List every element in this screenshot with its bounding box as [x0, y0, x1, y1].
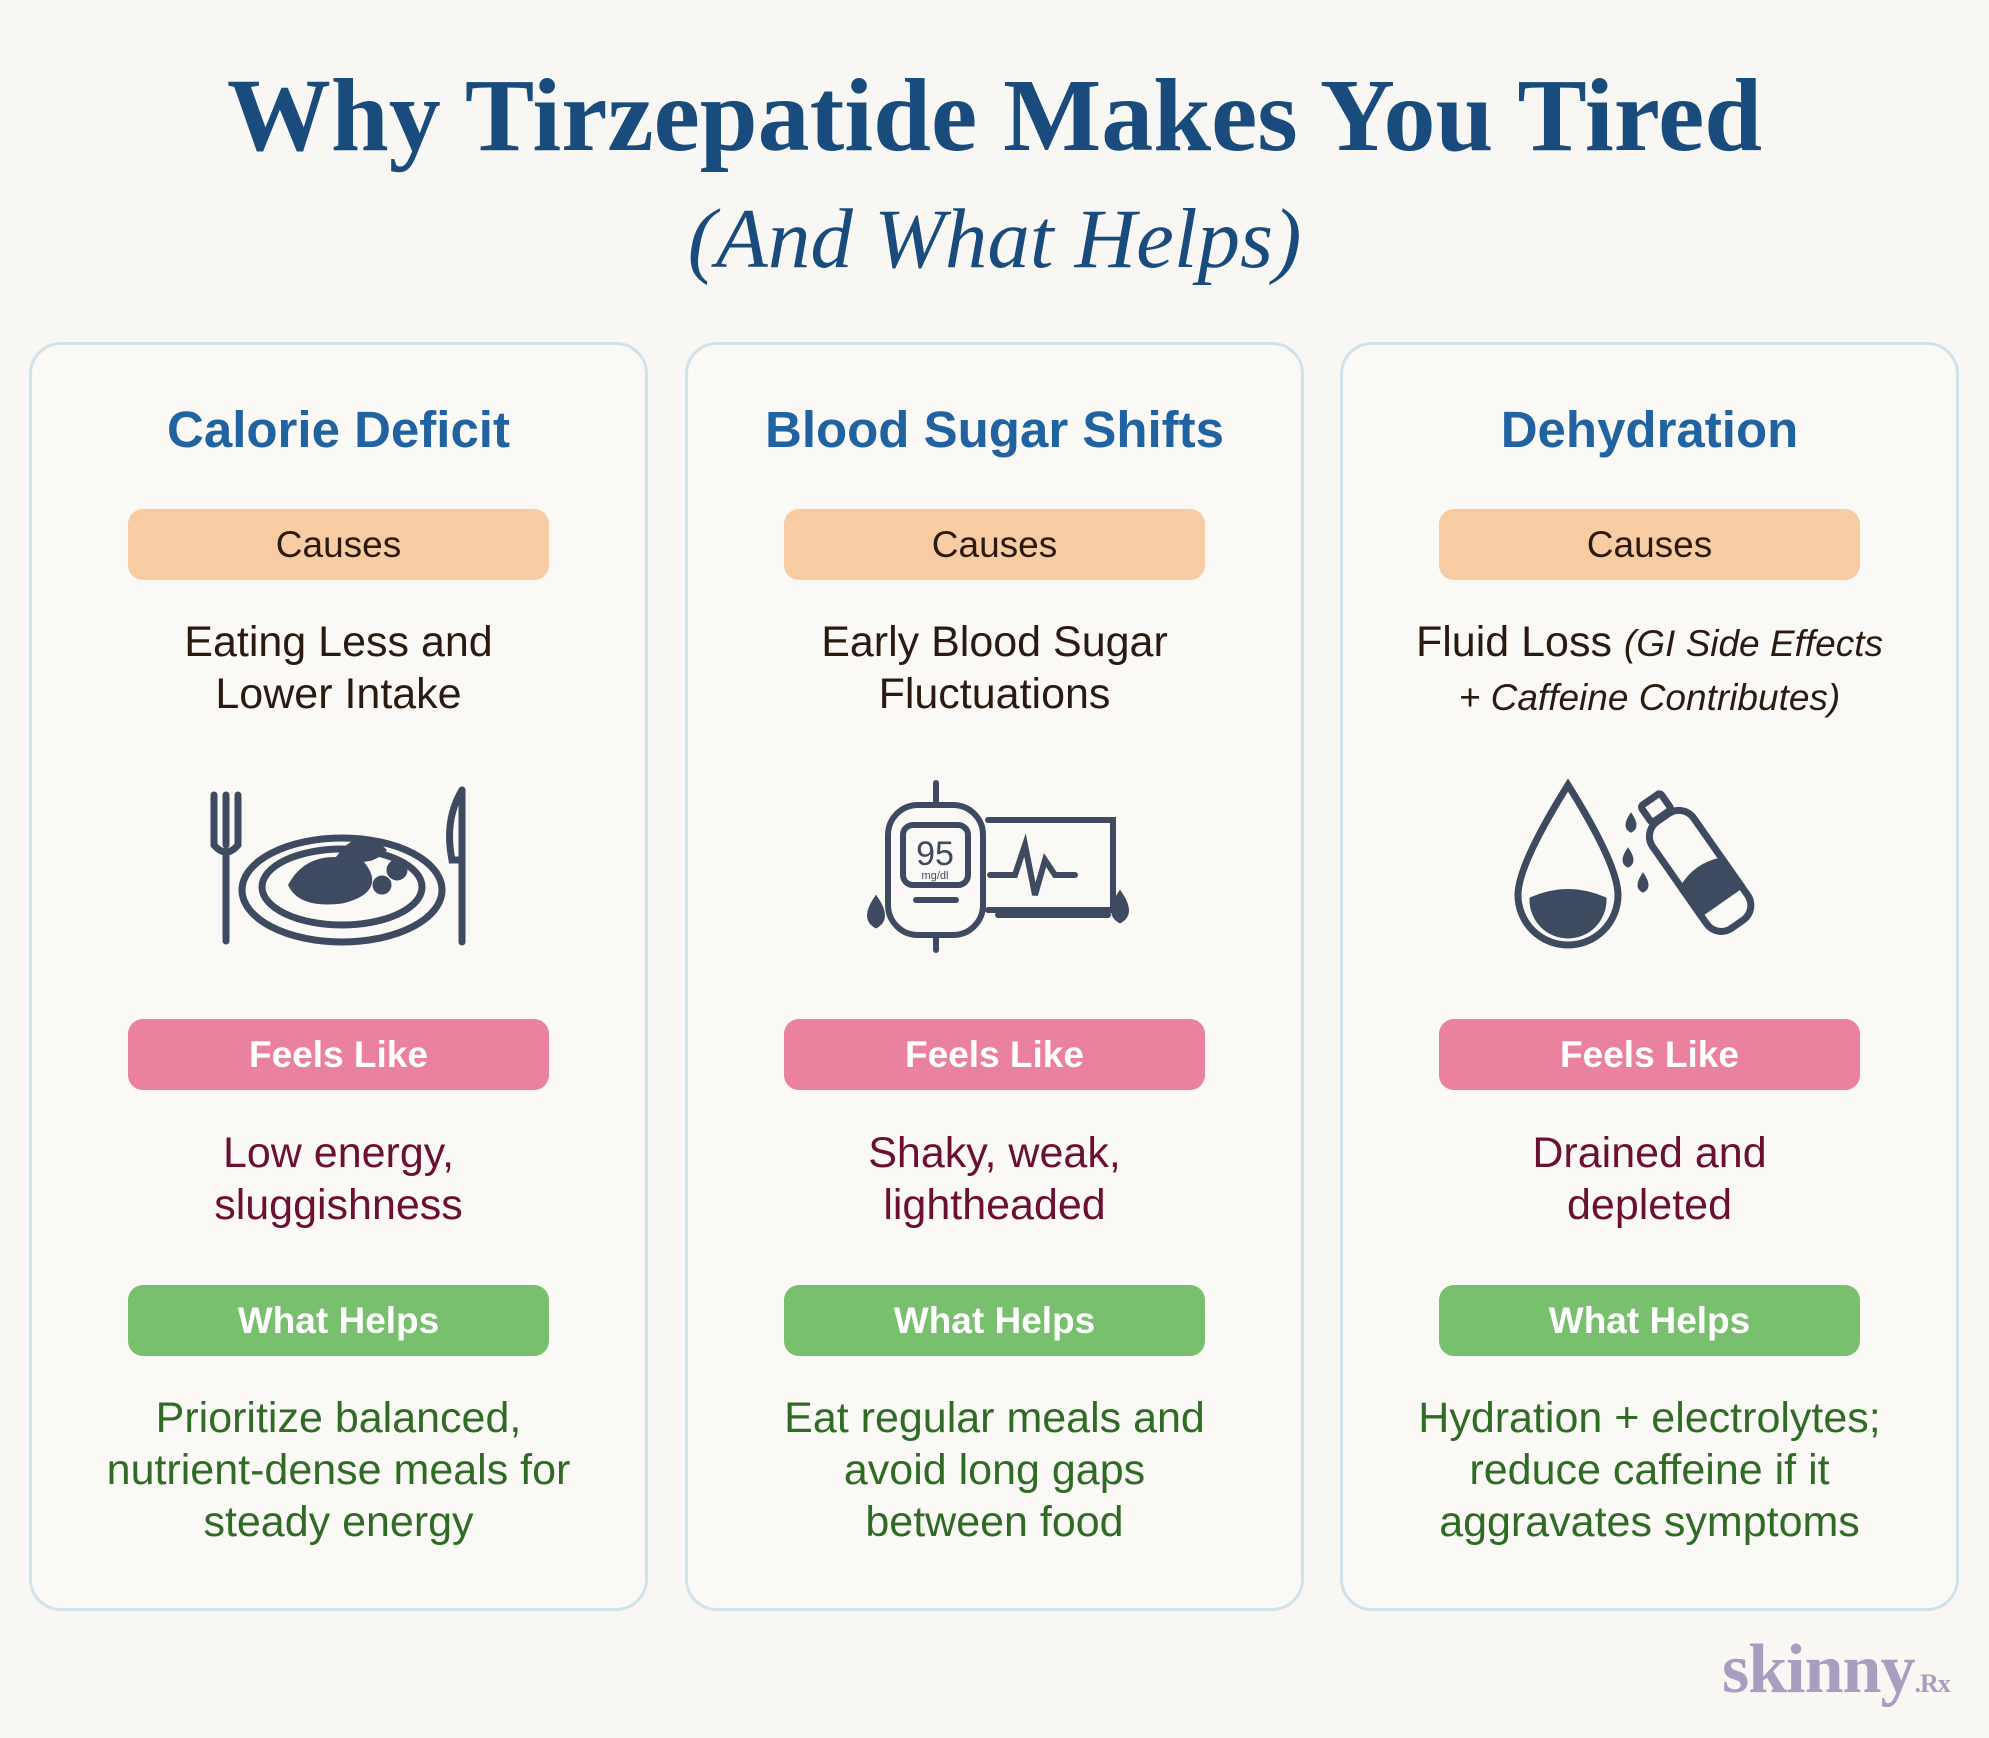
what helps pill — [128, 1285, 549, 1356]
what helps text — [107, 1394, 570, 1546]
feels like text — [868, 1129, 1121, 1229]
feels like pill: Feels Like — [905, 1034, 1084, 1075]
causes pill: Causes — [932, 524, 1057, 565]
what helps pill — [784, 1285, 1205, 1356]
causes text: Fluctuations — [879, 670, 1110, 718]
feels like text: Drained and — [1532, 1129, 1767, 1177]
causes pill — [1439, 509, 1860, 580]
what helps text — [1418, 1394, 1881, 1546]
panel: calorie deficit — [29, 342, 648, 1611]
feels like pill: Feels Like — [1560, 1034, 1739, 1075]
icon: water drop and bottle — [1514, 778, 1754, 948]
causes text: + Caffeine Contributes) — [1459, 677, 1840, 718]
what helps text: avoid long gaps — [844, 1446, 1145, 1494]
causes text: Eating Less and — [184, 618, 493, 666]
feels like text: depleted — [1567, 1181, 1732, 1229]
what helps pill: What Helps — [894, 1300, 1095, 1341]
causes text — [821, 618, 1168, 718]
feels like text: Low energy, — [223, 1129, 454, 1177]
causes pill — [784, 509, 1205, 580]
feels like text: sluggishness — [214, 1181, 463, 1229]
causes text: Fluid Loss (GI Side Effects — [1416, 618, 1883, 666]
what helps text — [784, 1394, 1205, 1546]
causes pill — [128, 509, 549, 580]
what helps pill: What Helps — [1549, 1300, 1750, 1341]
what helps text: nutrient-dense meals for — [107, 1446, 570, 1494]
feels like pill — [1439, 1019, 1860, 1090]
icon: plate and cutlery — [210, 786, 466, 946]
feels like pill: Feels Like — [249, 1034, 428, 1075]
feels like text: Shaky, weak, — [868, 1129, 1121, 1177]
subtitle: (And What Helps) — [688, 192, 1301, 286]
heading: Dehydration — [1501, 401, 1798, 458]
feels like pill — [128, 1019, 549, 1090]
causes pill: Causes — [276, 524, 401, 565]
feels like pill — [784, 1019, 1205, 1090]
heading: Blood Sugar Shifts — [765, 401, 1224, 458]
causes text: Lower Intake — [215, 670, 462, 718]
causes text — [184, 618, 493, 718]
feels like text — [1532, 1129, 1767, 1229]
what helps text: reduce caffeine if it — [1469, 1446, 1830, 1494]
feels like text — [214, 1129, 463, 1229]
what helps text: steady energy — [203, 1498, 474, 1546]
causes pill: Causes — [1587, 524, 1712, 565]
icon: glucose meter: 95 — [916, 835, 954, 873]
logo: skinny.Rx — [1722, 1631, 1950, 1708]
what helps text: Prioritize balanced, — [156, 1394, 521, 1442]
panel: blood sugar shifts — [685, 342, 1304, 1611]
feels like text: lightheaded — [883, 1181, 1106, 1229]
what helps text: between food — [865, 1498, 1124, 1546]
causes text — [1416, 618, 1883, 718]
panel: dehydration — [1340, 342, 1959, 1611]
what helps text: aggravates symptoms — [1439, 1498, 1860, 1546]
icon: glucose meter: mg/dl — [922, 870, 948, 882]
title: Why Tirzepatide Makes You Tired — [227, 58, 1762, 173]
causes text: Early Blood Sugar — [821, 618, 1168, 666]
what helps text: Hydration + electrolytes; — [1418, 1394, 1881, 1442]
what helps text: Eat regular meals and — [784, 1394, 1205, 1442]
icon: glucose meter — [867, 780, 1129, 953]
heading: Calorie Deficit — [167, 401, 510, 458]
what helps pill — [1439, 1285, 1860, 1356]
what helps pill: What Helps — [238, 1300, 439, 1341]
